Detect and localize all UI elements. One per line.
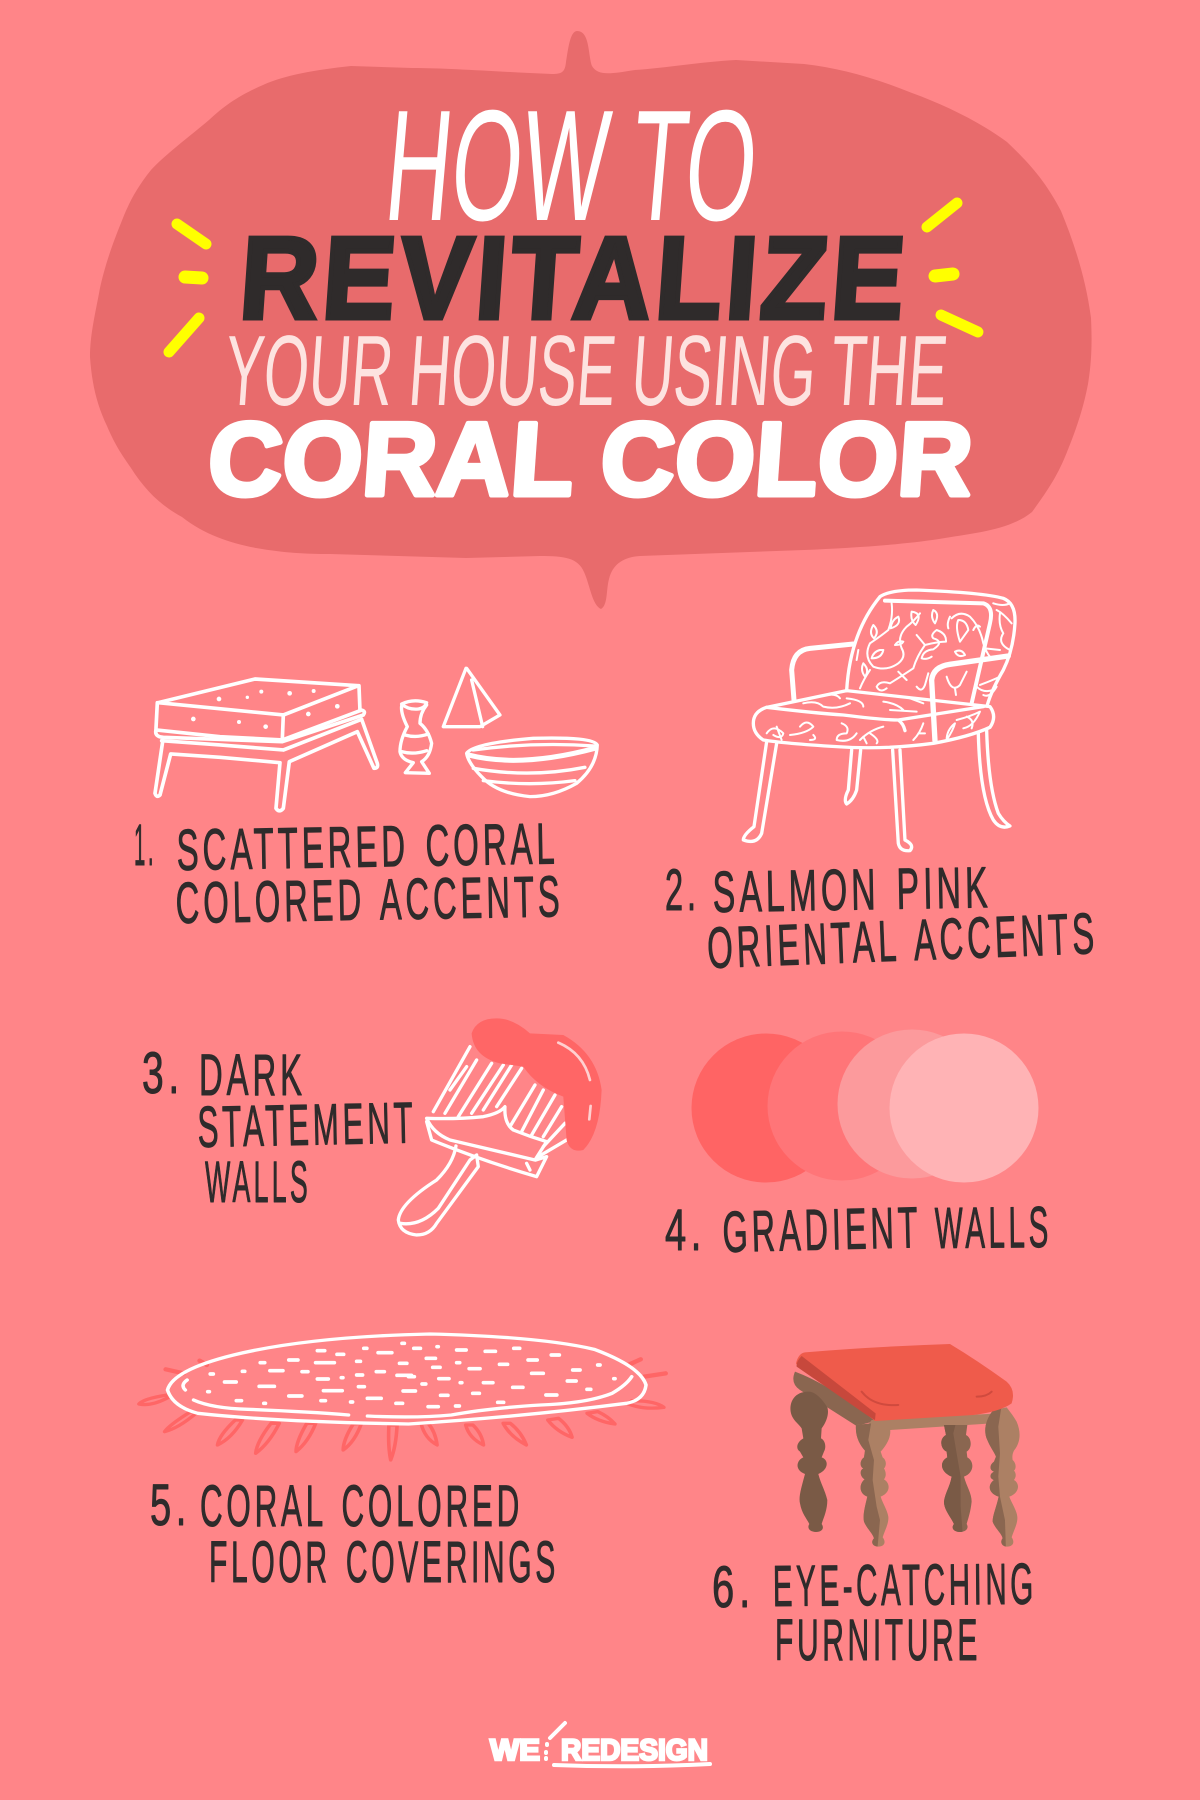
yellow sparks left [169, 224, 206, 352]
paint highlights [558, 1043, 591, 1119]
logo brush [546, 1723, 565, 1759]
number 3: 3. [142, 1041, 184, 1106]
front right leg light side [985, 1407, 1020, 1547]
label: item 4 [665, 1195, 1052, 1265]
first line: CORAL COLORED [200, 1474, 523, 1539]
blob background [90, 31, 1092, 609]
seat shadow side [797, 1356, 876, 1420]
word: walls: WALLS [935, 1195, 1052, 1261]
icon: table, vase, pyramid, bowl [155, 668, 597, 811]
label: item 3 [142, 1041, 417, 1215]
logo underline [554, 1764, 710, 1766]
back right leg dark side [941, 1425, 962, 1532]
front left leg dark side [856, 1424, 880, 1546]
second line: COLORED ACCENTS [175, 864, 564, 936]
icon: armchair [743, 590, 1015, 851]
second line: FURNITURE [775, 1608, 981, 1673]
label: item 1: 1. [134, 813, 156, 878]
floral pattern [767, 603, 1012, 743]
stool apron [793, 1372, 875, 1426]
item 5: coral colored floor coverings [139, 1334, 666, 1595]
icon: coral stool [790, 1344, 1020, 1547]
seat wrinkles [862, 1392, 992, 1405]
item 1: scattered coral colored accents [134, 668, 597, 936]
rug outline [167, 1334, 646, 1424]
rug dashes [208, 1343, 615, 1407]
logo word: redesign: REDESIGN [561, 1734, 708, 1767]
label: item 5 [150, 1473, 559, 1595]
number 2: 2. [665, 858, 700, 923]
front right leg dark side [985, 1409, 1006, 1546]
logo [490, 1723, 710, 1767]
yellow sparks right [927, 203, 978, 332]
item 2: salmon pink oriental accents [665, 590, 1099, 981]
title: coral color: CORAL COLOR [204, 402, 976, 518]
rug fringe [139, 1359, 666, 1460]
back left leg [790, 1392, 828, 1532]
back right leg [941, 1425, 972, 1532]
lightest circle [890, 1034, 1038, 1182]
title: how to: HOW TO [379, 77, 764, 254]
darkest circle [692, 1034, 840, 1182]
icon: gradient circles [692, 1030, 1038, 1182]
number 5: 5. [150, 1473, 191, 1538]
front right leg [985, 1407, 1020, 1547]
title: revitalize: REVITALIZE [236, 213, 913, 343]
icon: ottoman table [155, 679, 378, 811]
label: item 2 [665, 855, 1099, 981]
item 6: eye-catching furniture [712, 1344, 1037, 1673]
back right leg light side [941, 1425, 972, 1532]
label: item 1 [134, 811, 564, 936]
number 4: 4. [665, 1198, 706, 1263]
second line: FLOOR COVERINGS [209, 1530, 559, 1595]
second circle [768, 1032, 916, 1180]
logo word: we: WE [490, 1734, 540, 1767]
paint drip [472, 1018, 602, 1151]
word: gradient: GRADIENT [722, 1195, 922, 1265]
stool apron front [867, 1413, 1000, 1430]
rug inner line [183, 1377, 632, 1417]
chair frame [743, 590, 1015, 851]
label: item 6 [712, 1552, 1037, 1673]
front left leg light side [856, 1423, 890, 1547]
seat top [796, 1344, 1013, 1421]
item 3: dark statement walls [142, 1018, 602, 1235]
third circle [838, 1030, 986, 1178]
label: item 3: WALLS [205, 1150, 311, 1215]
second line: STATEMENT [197, 1090, 417, 1160]
first line: DARK [199, 1043, 306, 1108]
item 4: gradient walls [665, 1030, 1052, 1265]
first line: SALMON PINK [712, 855, 992, 925]
icon: bowl [467, 738, 597, 797]
first line: SCATTERED CORAL [176, 811, 559, 883]
icon: paint brush [398, 1018, 602, 1235]
icon: pyramid [443, 668, 500, 727]
header panel [90, 31, 1092, 609]
icon: vase [400, 701, 432, 773]
front left leg [856, 1423, 890, 1547]
brush outline [398, 1047, 567, 1235]
number 6: 6. [712, 1555, 755, 1620]
icon: oval rug [139, 1334, 666, 1460]
